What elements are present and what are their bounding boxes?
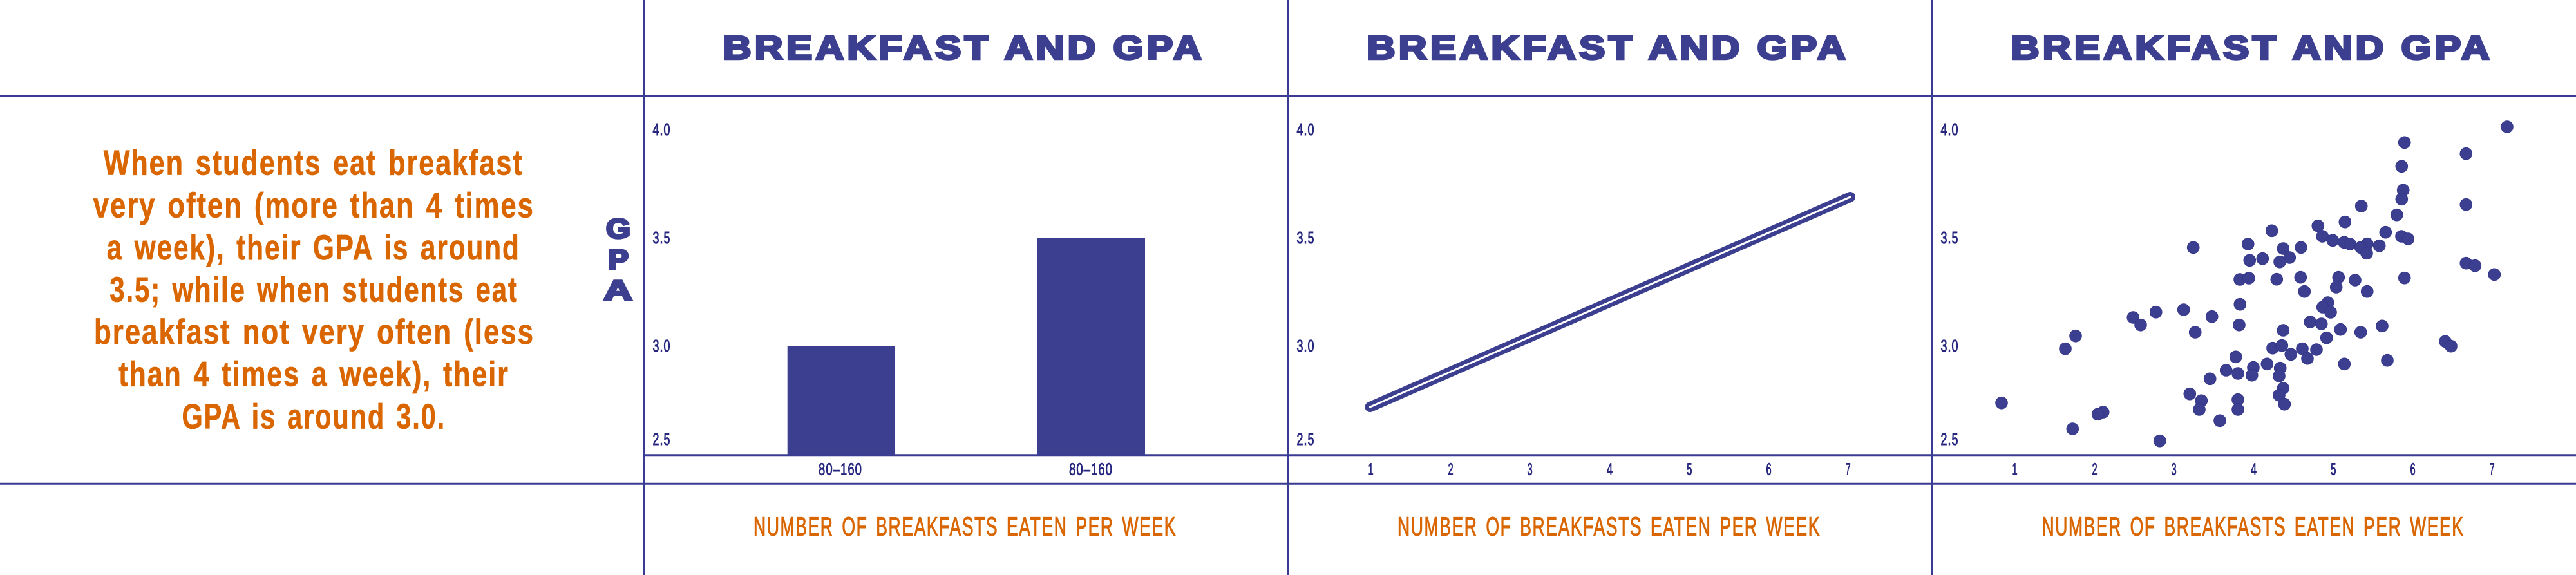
y axis labels <box>1297 120 1315 449</box>
y axis heading: GPA: G <box>606 214 630 245</box>
x axis labels: 6 <box>1766 460 1772 479</box>
y axis labels: 2.5 <box>653 429 671 449</box>
x axis labels: 5 <box>2331 460 2336 479</box>
y axis heading: GPA: A <box>604 276 632 306</box>
y axis labels: 3.5 <box>1297 228 1315 247</box>
y axis labels: 4.0 <box>653 120 671 139</box>
panel: bar chart <box>653 30 1205 541</box>
x axis labels: 5 <box>1687 460 1692 479</box>
y axis labels: 3.0 <box>1297 336 1315 355</box>
x axis labels: 2 <box>2092 460 2098 479</box>
y axis labels: 4.0 <box>1941 120 1959 139</box>
x axis title: NUMBER OF BREAKFASTS EATEN PER WEEK <box>753 511 1177 541</box>
y axis labels: 3.0 <box>653 336 671 355</box>
x axis labels: 1 <box>2012 460 2018 479</box>
x axis labels: 3 <box>2172 460 2177 479</box>
x axis labels <box>1368 460 1851 479</box>
x axis labels: 3 <box>1528 460 1533 479</box>
y axis labels: 2.5 <box>1297 429 1315 449</box>
panel: scatter plot <box>1941 30 2513 541</box>
x axis labels <box>819 460 1113 479</box>
text block: breakfast summary: very often (more than 4 times <box>93 185 535 225</box>
heading: scatter plot title: BREAKFAST AND GPA <box>2011 30 2493 66</box>
text block: breakfast summary: When students eat breakfast <box>104 143 524 183</box>
heading: line chart title: BREAKFAST AND GPA <box>1367 30 1849 66</box>
x axis labels: 7 <box>1846 460 1851 479</box>
x axis labels: 7 <box>2490 460 2495 479</box>
y axis labels: 3.5 <box>653 228 671 247</box>
y axis labels: 3.0 <box>1941 336 1959 355</box>
x axis labels: 4 <box>1607 460 1613 479</box>
y axis heading: GPA: P <box>608 245 629 276</box>
y axis labels <box>1941 120 1959 449</box>
y axis labels <box>653 120 671 449</box>
x axis labels: 4 <box>2251 460 2257 479</box>
x axis title: NUMBER OF BREAKFASTS EATEN PER WEEK <box>1397 511 1821 541</box>
x axis labels: 1 <box>1368 460 1374 479</box>
x axis labels: 80–160 <box>1069 460 1113 479</box>
text block: breakfast summary: 3.5; while when students eat <box>109 269 518 309</box>
heading: bar chart title: BREAKFAST AND GPA <box>723 30 1205 66</box>
trend line <box>1370 197 1850 407</box>
text block: breakfast summary: GPA is around 3.0. <box>182 396 446 436</box>
x axis labels <box>2012 460 2495 479</box>
panel: line chart <box>1297 30 1851 541</box>
x axis labels: 80–160 <box>819 460 862 479</box>
y axis labels: 3.5 <box>1941 228 1959 247</box>
bars <box>788 238 1145 455</box>
text block: breakfast summary: a week), their GPA is around <box>107 227 520 267</box>
scatter points <box>1995 121 2513 447</box>
text block: breakfast summary: than 4 times a week), their <box>118 354 509 394</box>
y axis heading: GPA <box>604 214 632 306</box>
text block: breakfast summary: breakfast not very often (less <box>94 312 535 352</box>
y axis labels: 2.5 <box>1941 429 1959 449</box>
x axis labels: 6 <box>2410 460 2416 479</box>
y axis labels: 4.0 <box>1297 120 1315 139</box>
text block: breakfast summary <box>93 143 535 436</box>
x axis labels: 2 <box>1448 460 1454 479</box>
